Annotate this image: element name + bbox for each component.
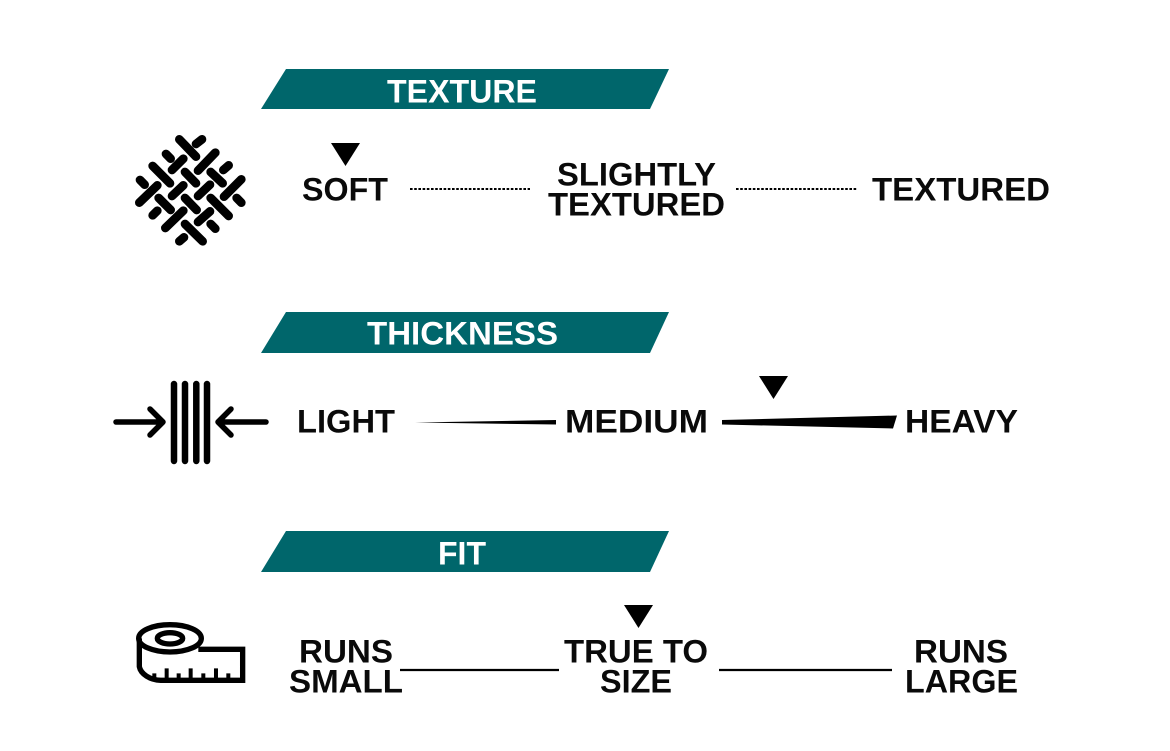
label: light: LIGHT bbox=[297, 404, 395, 440]
icon: woven fabric bbox=[139, 139, 241, 241]
label: runs large bbox=[905, 634, 1018, 700]
marker: true to size bbox=[624, 605, 653, 628]
marker: soft bbox=[331, 143, 360, 166]
icon: compressed layers bbox=[116, 384, 266, 461]
label: runs large: LARGE bbox=[905, 664, 1018, 700]
label: true to size: SIZE bbox=[600, 664, 672, 700]
label: slightly textured bbox=[548, 156, 725, 222]
icon: measuring tape bbox=[139, 625, 243, 680]
heading: thickness bbox=[261, 312, 669, 353]
label: runs small bbox=[289, 634, 403, 700]
label: soft: SOFT bbox=[302, 172, 388, 208]
dotted connector: slightly textured to textured bbox=[736, 188, 857, 190]
label: medium: MEDIUM bbox=[565, 404, 708, 440]
label: true to size bbox=[564, 634, 708, 700]
label: slightly textured: TEXTURED bbox=[548, 186, 725, 222]
label: true to size: TRUE TO bbox=[564, 634, 708, 670]
tapered line: light to medium bbox=[415, 420, 556, 424]
marker: medium to heavy bbox=[759, 376, 788, 399]
heading: thickness: THICKNESS bbox=[367, 316, 558, 352]
heading: fit bbox=[261, 531, 669, 572]
panel: fit bbox=[139, 531, 1018, 700]
label: runs large: RUNS bbox=[914, 634, 1008, 670]
heading: fit: FIT bbox=[438, 536, 486, 572]
panel: texture bbox=[139, 69, 1050, 241]
label: runs small: SMALL bbox=[289, 664, 403, 700]
panel: thickness bbox=[116, 312, 1018, 461]
label: textured: TEXTURED bbox=[872, 172, 1050, 208]
label: slightly textured: SLIGHTLY bbox=[557, 156, 716, 192]
line: true to size to runs large bbox=[719, 669, 892, 671]
label: runs small: RUNS bbox=[299, 634, 393, 670]
heading: texture bbox=[261, 69, 669, 110]
label: heavy: HEAVY bbox=[905, 404, 1018, 440]
heading: texture: TEXTURE bbox=[387, 74, 537, 110]
line: runs small to true to size bbox=[400, 669, 559, 671]
dotted connector: soft to slightly textured bbox=[410, 188, 530, 190]
tapered line: medium to heavy bbox=[722, 416, 897, 428]
